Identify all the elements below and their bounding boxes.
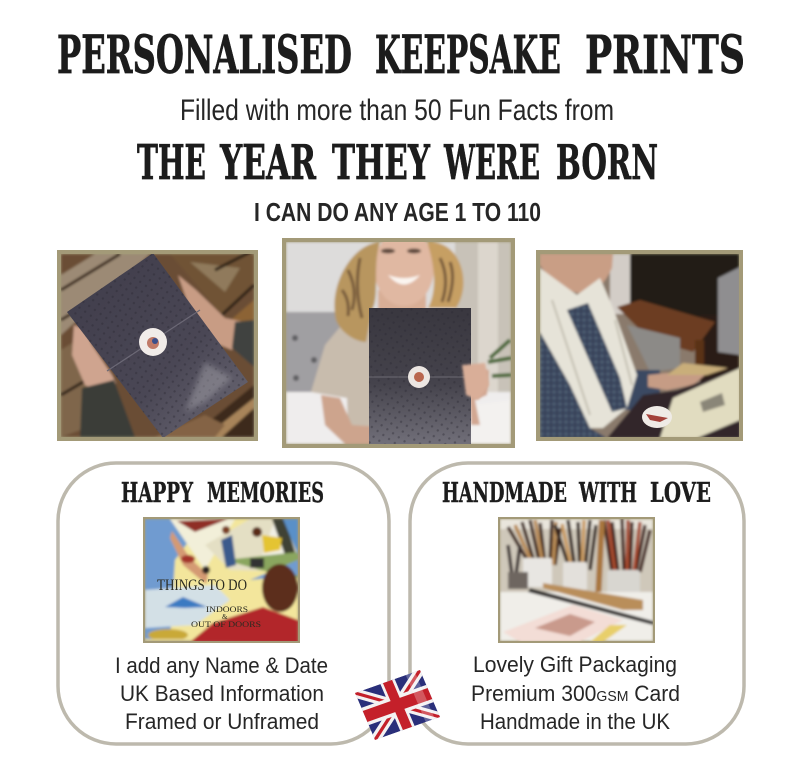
panel: handmade with love bbox=[410, 463, 744, 744]
black folder bbox=[606, 375, 739, 437]
title: KEEPSAKE bbox=[375, 25, 561, 86]
print bbox=[660, 368, 740, 438]
heading: the year they were born: THE bbox=[137, 135, 206, 191]
table bbox=[500, 592, 653, 641]
icon: union jack flag bbox=[355, 670, 440, 740]
title: PERSONALISED bbox=[57, 25, 352, 86]
heading: the year they were born bbox=[137, 135, 658, 191]
photo: woman reading keepsake print bbox=[536, 250, 743, 441]
envelope bbox=[67, 253, 248, 438]
seal bbox=[642, 406, 672, 428]
heading: handmade with love: HANDMADE bbox=[442, 478, 567, 509]
title bbox=[57, 25, 745, 86]
hair bbox=[334, 242, 380, 342]
list: handmade features: Handmade in the UK bbox=[480, 709, 670, 734]
image: things to do book cover bbox=[143, 517, 300, 643]
blouse bbox=[540, 332, 607, 438]
envelope bbox=[369, 308, 471, 445]
neck and face bbox=[376, 289, 428, 308]
heading: handmade with love: WITH bbox=[578, 478, 637, 509]
side table bbox=[617, 300, 715, 352]
heading: the year they were born: YEAR bbox=[219, 135, 317, 191]
list: happy memories features: I add any Name & Date bbox=[115, 653, 328, 678]
figures bbox=[170, 531, 208, 584]
swimmer water bbox=[145, 585, 230, 628]
pots bbox=[523, 558, 552, 587]
list: happy memories features: UK Based Information bbox=[120, 681, 324, 706]
list: handmade features bbox=[471, 652, 680, 734]
image: things to do book cover: INDOORS bbox=[206, 604, 248, 614]
girl bbox=[190, 607, 298, 643]
palette sheet bbox=[503, 605, 623, 642]
heading: handmade with love: LOVE bbox=[650, 478, 711, 509]
lamp bbox=[148, 629, 188, 641]
right hand bbox=[178, 275, 245, 350]
arms bbox=[320, 394, 369, 444]
list: happy memories features: Framed or Unframed bbox=[125, 709, 319, 734]
image: things to do book cover: OUT OF DOORS bbox=[191, 619, 261, 629]
hand bbox=[462, 363, 489, 400]
heading: happy memories: HAPPY bbox=[121, 478, 193, 509]
face bbox=[540, 254, 613, 293]
left hand bbox=[72, 325, 116, 392]
cover text: THINGS TO DO bbox=[157, 577, 247, 594]
brushes bbox=[508, 519, 650, 600]
heading: happy memories: MEMORIES bbox=[207, 478, 324, 509]
plant bbox=[488, 340, 511, 376]
hand bbox=[648, 373, 705, 390]
heading: the year they were born: THEY bbox=[332, 135, 430, 191]
photo: hands holding wrapped print bbox=[57, 250, 258, 441]
tee bbox=[310, 322, 369, 428]
seal bbox=[139, 328, 167, 356]
armchair bbox=[627, 325, 680, 372]
image: things to do book cover: & bbox=[222, 613, 228, 621]
subtitle: Filled with more than 50 Fun Facts from bbox=[180, 94, 614, 127]
list: handmade features: Lovely Gift Packaging bbox=[473, 652, 677, 677]
heading: happy memories bbox=[121, 478, 324, 509]
scarf bbox=[540, 268, 637, 428]
tan folder bbox=[667, 363, 728, 375]
list: handmade features: Premium 300GSM Card bbox=[471, 681, 680, 706]
photo: smiling woman holding wrapped print bbox=[282, 230, 515, 448]
heading: the year they were born: WERE bbox=[443, 135, 540, 191]
age range line: I CAN DO ANY AGE 1 TO 110 bbox=[254, 197, 541, 227]
image: artist brushes and palette bbox=[498, 517, 655, 643]
list: happy memories features bbox=[115, 653, 328, 734]
panel: happy memories bbox=[58, 463, 389, 744]
seal bbox=[408, 366, 430, 388]
heading: the year they were born: BORN bbox=[556, 135, 658, 191]
bed bbox=[286, 392, 511, 444]
